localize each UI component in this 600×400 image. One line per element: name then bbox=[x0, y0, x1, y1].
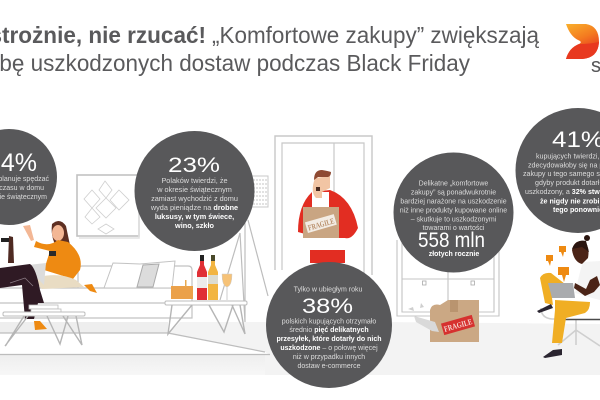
shirt and arm bbox=[575, 261, 600, 300]
circle: share planning time at home: 4% bbox=[1, 149, 37, 177]
circle: 38% delicate parcels: polskich kupujących otrzymało bbox=[282, 318, 376, 326]
whisky glass tray bbox=[171, 280, 193, 299]
wine bottles bbox=[197, 255, 218, 300]
damaged fragile parcel bbox=[408, 300, 479, 342]
woman in orange sweater on sofa bbox=[23, 221, 97, 293]
man in dark trousers on sofa bbox=[0, 236, 47, 330]
circle: 38% delicate parcels: 38% bbox=[302, 295, 353, 318]
damaged fragile parcel: FRAGILE bbox=[443, 317, 473, 334]
circle: 23% small luxuries: 23% bbox=[168, 154, 220, 177]
door bbox=[275, 136, 372, 275]
courier holding fragile parcel bbox=[298, 170, 358, 263]
circle: 38% delicate parcels: przesyłek, które dotarły do nich bbox=[276, 336, 382, 343]
circle: share planning time at home: czasu w domu bbox=[0, 185, 44, 192]
icon: thumbs down reactions bbox=[546, 246, 569, 282]
circle: 23% small luxuries: zamiast wychodzić z domu bbox=[151, 194, 238, 203]
sofa bbox=[0, 261, 192, 318]
picture frame with geometric art bbox=[77, 175, 139, 238]
seated man with laptop bbox=[537, 235, 600, 358]
circle: 23% small luxuries: w okresie świątecznym bbox=[156, 185, 232, 194]
circle: 38% delicate parcels: średnio pięć delikatnych bbox=[289, 327, 369, 334]
circle: 558 mln damaged goods bbox=[394, 152, 514, 272]
circle: 41% repeat purchases: gdyby produkt dotarł bbox=[535, 179, 600, 187]
circle: 23% small luxuries: luksusy, w tym świece, bbox=[155, 212, 234, 221]
circle: 558 mln damaged goods: niż inne produkty kupowane online bbox=[400, 208, 507, 214]
circle: 558 mln damaged goods: zakupy” są ponadwukrotnie bbox=[411, 190, 496, 196]
circle: 38% delicate parcels: Tylko w ubiegłym roku bbox=[294, 286, 363, 294]
floor lamp legs bbox=[220, 220, 268, 322]
circle: 558 mln damaged goods: towarami o wartości bbox=[423, 225, 485, 232]
chair bbox=[541, 308, 600, 346]
circle: 41% repeat purchases: że nigdy nie zrobi bbox=[540, 198, 600, 206]
wavy wall art bbox=[250, 176, 268, 207]
shoes bbox=[537, 304, 553, 313]
circle: 23% small luxuries: wyda pieniądze na drobne bbox=[150, 203, 238, 212]
circle: 23% small luxuries bbox=[134, 131, 254, 251]
circle: 23% small luxuries: wino, szkło bbox=[174, 221, 215, 230]
head bbox=[572, 241, 588, 264]
title: „Komfortowe zakupy” zwiększają bbox=[212, 22, 539, 48]
room background bbox=[0, 322, 600, 375]
logo bbox=[566, 24, 600, 77]
circle: 558 mln damaged goods: – skutkuje to uszkodzonymi bbox=[411, 216, 497, 224]
striped cushion behind woman bbox=[28, 263, 46, 285]
side table bbox=[165, 301, 247, 334]
laptop bbox=[548, 283, 575, 298]
circle: 558 mln damaged goods: bardziej narażone na uszkodzenie bbox=[400, 198, 507, 206]
fragile box held by courier: FRAGILE bbox=[307, 216, 335, 233]
yellow trousers bbox=[540, 273, 565, 305]
title bbox=[0, 22, 539, 76]
circle: 558 mln damaged goods: 558 mln bbox=[418, 229, 485, 252]
circle: 558 mln damaged goods: złotych rocznie bbox=[429, 251, 479, 258]
circle: 558 mln damaged goods: Delikatne „komfortowe bbox=[419, 180, 488, 188]
wine glass bbox=[222, 274, 232, 300]
circle: 38% delicate parcels bbox=[266, 262, 392, 388]
circle: share planning time at home bbox=[0, 129, 57, 225]
circle: 38% delicate parcels: uszkodzone – o połowę więcej bbox=[280, 345, 378, 352]
circle: 23% small luxuries: Polaków twierdzi, że bbox=[161, 176, 228, 185]
circle: 38% delicate parcels: niż w przypadku innych bbox=[293, 354, 365, 361]
coffee table with books bbox=[3, 305, 85, 346]
circle: 41% repeat purchases bbox=[516, 108, 600, 233]
circle: 41% repeat purchases: 41% bbox=[552, 127, 600, 152]
cabinet bbox=[397, 240, 499, 316]
circle: 38% delicate parcels: dostaw e-commerce bbox=[297, 363, 361, 370]
